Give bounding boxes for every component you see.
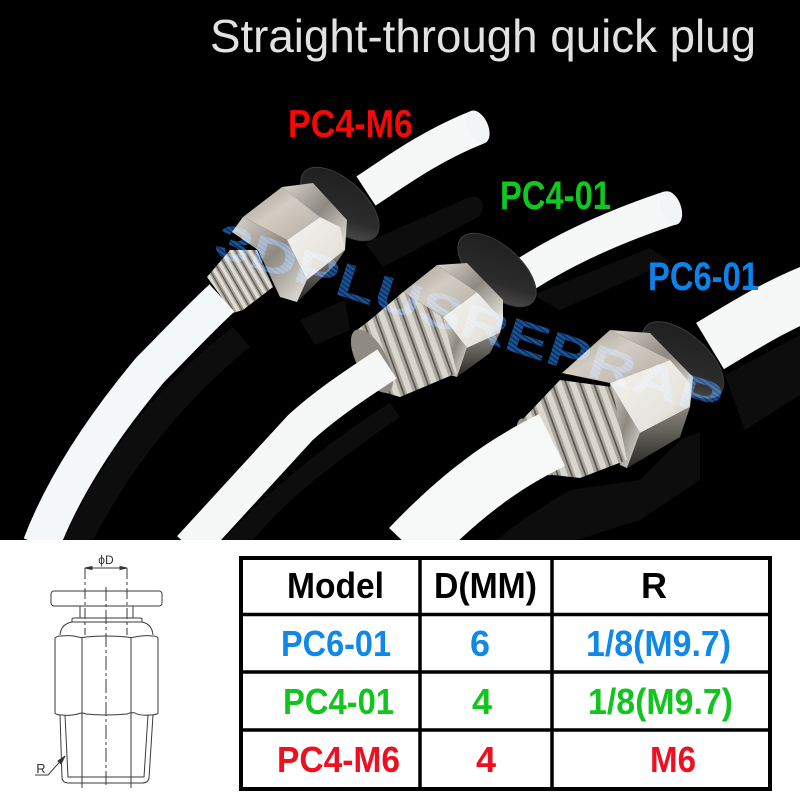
hex front facet bbox=[287, 217, 345, 280]
tube 2 end cap bbox=[664, 191, 682, 225]
tube 2 upper section bbox=[523, 208, 670, 276]
hex top facet bbox=[403, 265, 477, 317]
tube 3 upper section bbox=[710, 290, 800, 346]
thread body bbox=[60, 715, 153, 783]
dimension label: phi D: ϕD bbox=[98, 553, 114, 567]
row: PC6-01 bbox=[281, 623, 731, 664]
hex top facet bbox=[562, 330, 670, 383]
photo panel: black background bbox=[0, 0, 800, 540]
washer bbox=[642, 321, 724, 399]
hex top facet bbox=[243, 187, 320, 240]
washer bbox=[300, 166, 380, 242]
table bbox=[241, 558, 770, 789]
thread bbox=[207, 250, 273, 313]
product photo: tubes and fittings bbox=[41, 107, 800, 548]
header row: R bbox=[641, 565, 667, 606]
label: PC6-01: PC6-01 bbox=[648, 255, 759, 299]
label: PC4-01: PC4-01 bbox=[500, 174, 611, 218]
hex lower facet bbox=[457, 333, 500, 377]
neck bbox=[443, 317, 467, 377]
fitting: PC4-01 bbox=[350, 232, 537, 397]
centre line bbox=[105, 587, 107, 788]
fitting: PC6-01 bbox=[517, 321, 724, 478]
row: PC4-M6: PC4-M6 bbox=[277, 739, 400, 780]
stem bbox=[80, 606, 133, 618]
thread bbox=[357, 292, 457, 397]
label: PC4-M6: PC4-M6 bbox=[288, 103, 413, 146]
flange bbox=[51, 591, 162, 606]
thread rim bbox=[350, 329, 394, 393]
hex edges bbox=[82, 637, 131, 788]
hex lower facet bbox=[627, 407, 690, 468]
dome bbox=[60, 622, 153, 635]
neck bbox=[232, 217, 307, 302]
tube 2 lower section bbox=[190, 364, 387, 548]
row: PC4-01 bbox=[283, 681, 733, 722]
dimension label: R: R bbox=[36, 761, 46, 776]
row: PC4-M6 bbox=[277, 739, 696, 780]
watermark: 3DPLUSREPRAP bbox=[209, 214, 729, 428]
header row: Model bbox=[287, 565, 384, 606]
row: PC6-01: 1/8(M9.7) bbox=[586, 623, 731, 664]
row: PC4-01: PC4-01 bbox=[283, 681, 394, 722]
row: PC6-01: 6 bbox=[470, 623, 490, 664]
header row bbox=[287, 565, 667, 606]
title: Straight-through quick plug bbox=[210, 10, 756, 62]
hex lower facet bbox=[297, 250, 345, 302]
thread bbox=[522, 380, 627, 478]
dimension arrow bbox=[85, 567, 127, 569]
hex body bbox=[55, 636, 158, 715]
tube 1 upper section bbox=[366, 127, 478, 191]
header row: D(MM) bbox=[434, 565, 537, 606]
collar bbox=[282, 183, 347, 250]
washer bbox=[457, 232, 537, 308]
row: PC4-M6: M6 bbox=[650, 739, 696, 780]
row: PC4-01: 1/8(M9.7) bbox=[588, 681, 733, 722]
R leader bbox=[35, 756, 65, 775]
fitting: PC4-M6 bbox=[207, 166, 380, 313]
tube 3 lower section bbox=[410, 440, 552, 548]
row: PC6-01: PC6-01 bbox=[281, 623, 391, 664]
collar bbox=[437, 263, 503, 320]
tube 1 end cap bbox=[470, 110, 490, 144]
neck bbox=[610, 383, 640, 468]
hex front facet bbox=[610, 360, 690, 433]
panel: technical drawing bbox=[35, 566, 162, 788]
thread rim bbox=[517, 418, 554, 476]
row: PC4-M6: 4 bbox=[476, 739, 496, 780]
diameter guides bbox=[85, 568, 127, 635]
collar bbox=[610, 330, 693, 407]
row: PC4-01: 4 bbox=[472, 681, 492, 722]
table grid bbox=[241, 558, 770, 789]
collar bbox=[72, 618, 142, 622]
tube reflections bbox=[63, 197, 800, 540]
tube 1 lower section bbox=[41, 298, 222, 545]
hex front facet bbox=[443, 292, 503, 348]
